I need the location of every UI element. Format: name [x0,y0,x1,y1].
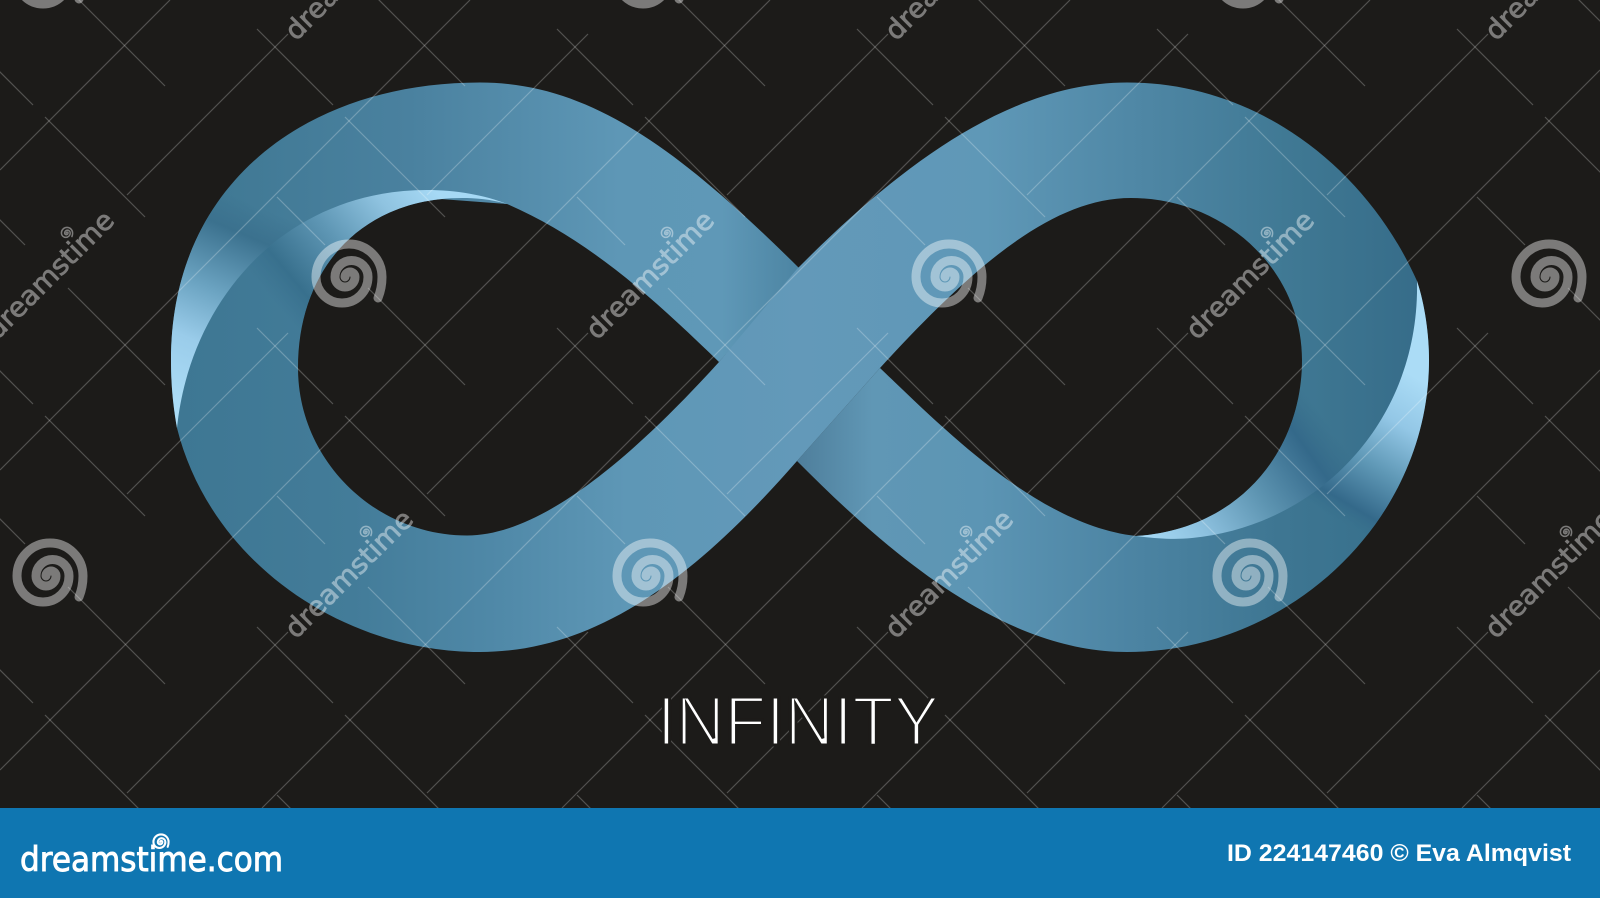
footer band [0,808,1600,898]
watermark: dreamstime text: dreamstime [580,205,721,346]
watermark: dreamstime text: dreamstime [279,504,420,645]
infinity symbol [171,82,1429,652]
ribbon: back strand of right loop [797,281,1429,652]
footer credit: image id and author: ID 224147460 © Eva Almqvist [1227,840,1571,867]
watermark: dreamstime text: dreamstime [879,504,1020,645]
watermark: dreamstime text: dreamstime [1180,205,1321,346]
ribbon: back strand of left loop [171,82,800,428]
watermark: spirals [17,0,1582,602]
title: INFINITY: INFINITY [657,682,939,760]
footer logo: dreamstime.com: dreamstime.com [20,840,283,880]
watermark: dreamstime text [0,0,1600,645]
ribbon: front strand crossing the centre [177,82,1417,652]
